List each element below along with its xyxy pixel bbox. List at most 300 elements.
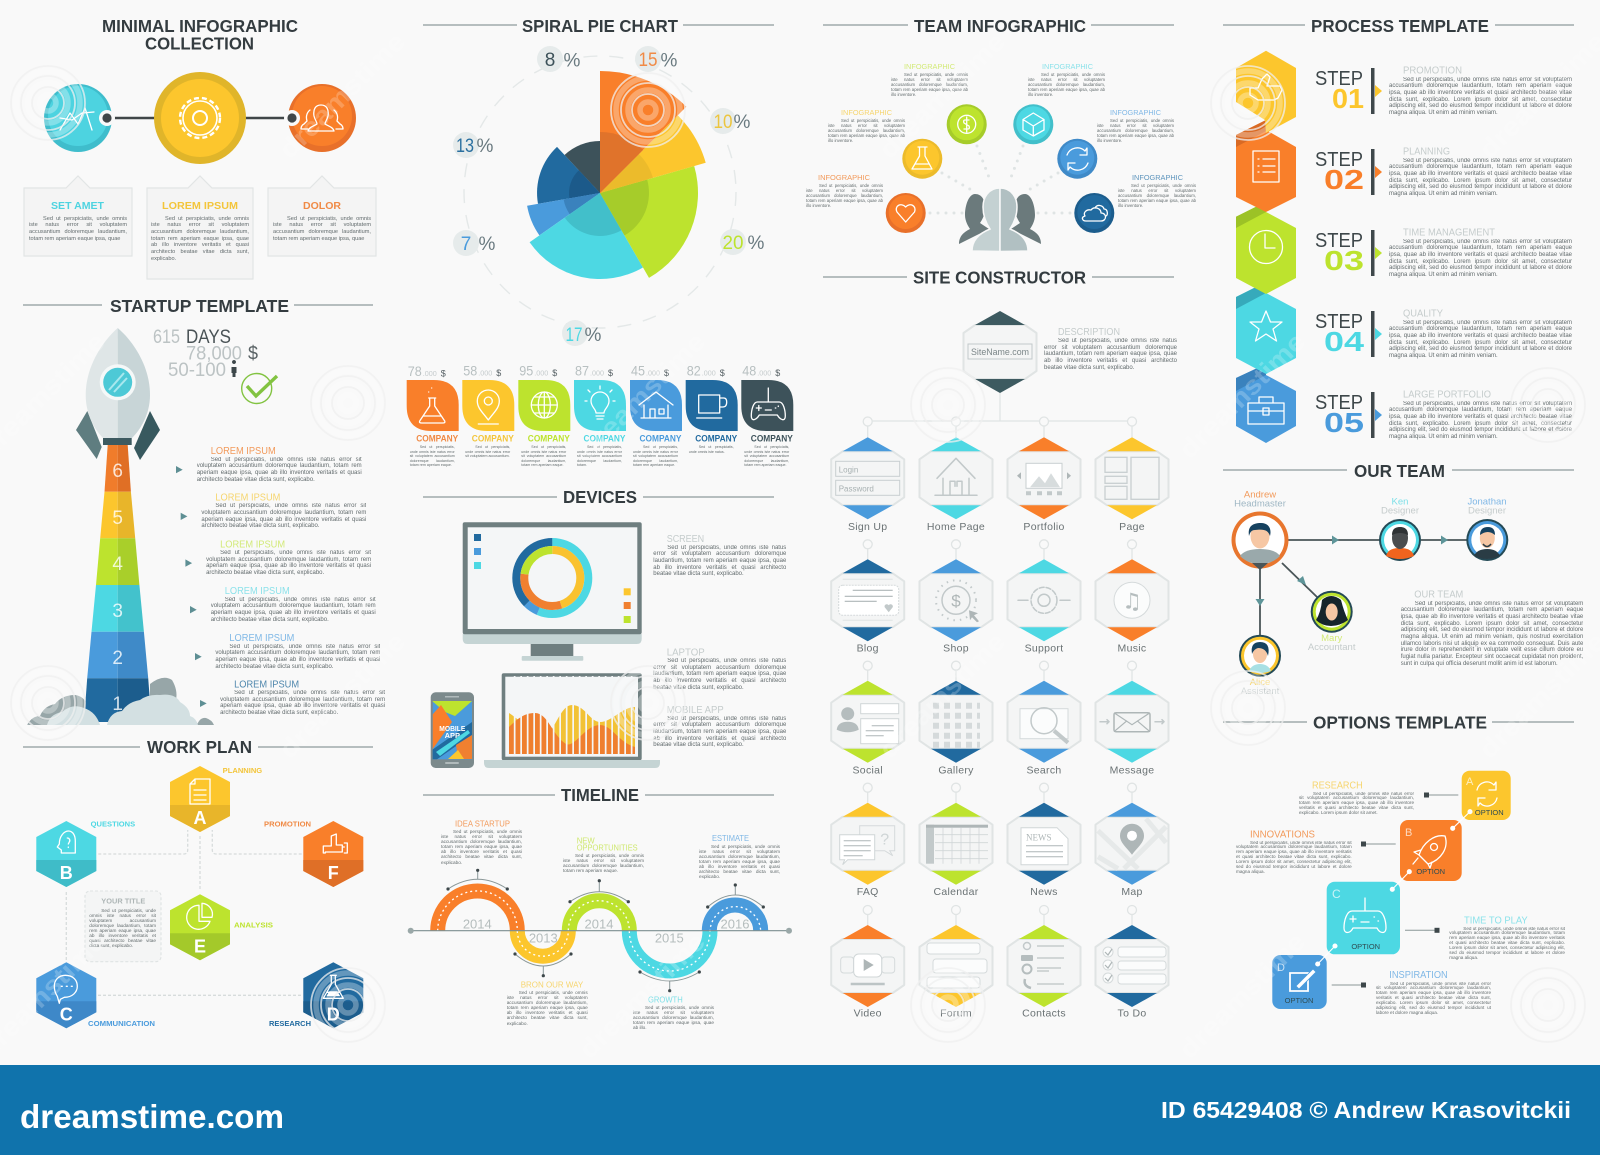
- panel: startup template: [23, 296, 385, 725]
- option D card: OPTION: [1285, 996, 1313, 1005]
- tile: news: News: [1030, 886, 1058, 898]
- callout: set amet: Sed ut perspiciatis, unde omnis iste natus error sit voluptatem accusantium doloremque laudantium, totam rem aperiam eaque ipsa, quae: [29, 216, 127, 242]
- footer credit: ID 65429408 © Andrew Krasovitckii: [1161, 1097, 1571, 1123]
- panel: our team: [1223, 461, 1583, 697]
- text box: your title: Sed ut perspiciatis, unde omnis iste natus error sit voluptatem accusantium doloremque laudantium, totam rem aperiam eaque ipsa, quae ab illo inventore veritatis et quasi architecto beatae vitae dicta sunt, explicabo.: [89, 908, 156, 948]
- hexagon labels: [88, 766, 311, 1028]
- step 6 text: LOREM IPSUM: [211, 446, 276, 457]
- node: heart: INFOGRAPHIC: [818, 173, 871, 182]
- icon: check mark: [242, 374, 277, 404]
- phone: APP: [445, 731, 460, 740]
- monitor with donut chart: [463, 522, 642, 661]
- milestone: idea startup: IDEA STARTUP: [455, 819, 510, 829]
- option C card: [1327, 882, 1400, 954]
- person: mary: [1308, 591, 1356, 653]
- hexagon labels: QUESTIONS: [91, 820, 135, 829]
- card: orange company flask: [407, 363, 459, 470]
- hexagon C communication: C: [60, 1004, 73, 1024]
- text: dreamstime: [273, 26, 411, 164]
- stats: days, money, people: [153, 327, 258, 381]
- card: dark company gamepad: 48: [742, 362, 756, 378]
- step 4 text: Sed ut perspiciatis, unde omnis iste natus error sit voluptatem accusantium doloremque laudantium, totam rem aperiam eaque ipsa, quae ab illo inventore veritatis et quasi architecto beatae vitae dicta sunt, explicabo.: [206, 550, 371, 576]
- person: mary: Accountant: [1308, 642, 1356, 653]
- milestone: new opportunities: NEW: [577, 835, 595, 845]
- text: dreamstime: [573, 326, 711, 464]
- hexagon D research: D: [327, 1004, 340, 1024]
- card: green company globe: $: [552, 368, 557, 378]
- wave chart: [408, 891, 792, 971]
- card: green company globe: [518, 362, 570, 470]
- stats: days, money, people: $: [248, 344, 258, 364]
- title: COLLECTION: [145, 34, 254, 54]
- percentage labels: %: [585, 325, 602, 346]
- step 2: STEP: [1315, 149, 1363, 171]
- person: jonathan: Jonathan: [1467, 496, 1507, 507]
- person: andrew: Andrew: [1244, 490, 1276, 501]
- option A card: [1462, 771, 1511, 820]
- tile: home page: Home Page: [927, 521, 985, 533]
- tile: calendar: [920, 783, 992, 898]
- connector tree: [863, 393, 1136, 426]
- tile: forum: [920, 906, 992, 1020]
- option text: inspiration: INSPIRATION: [1389, 970, 1448, 981]
- card: orange company flask: 78: [408, 363, 422, 379]
- step 3: STEP: [1315, 230, 1363, 252]
- connector dots: [99, 110, 300, 126]
- icon: orange people circle: [288, 84, 356, 152]
- icon: teal chart circle: [44, 84, 112, 152]
- option D card: [1272, 955, 1327, 1009]
- hexagon 3 clock: [1236, 202, 1296, 294]
- step 5: STEP: [1315, 392, 1363, 414]
- footer logo: dreamstime.com: [20, 1098, 284, 1135]
- tile: faq: FAQ: [857, 886, 879, 898]
- tile: to do: To Do: [1118, 1008, 1146, 1020]
- year labels: 2014: [463, 916, 492, 931]
- card: yellow company pin: Sed ut perspiciatis, unde omnis iste natus error sit voluptatem accusantium.: [465, 445, 510, 458]
- panel: work plan: [23, 737, 373, 1028]
- card: yellow company pin: .000: [478, 368, 492, 378]
- person: ken: Designer: [1381, 505, 1419, 516]
- hexagon labels: RESEARCH: [269, 1019, 311, 1028]
- text: screen: SCREEN: [667, 534, 704, 545]
- tile: social: [831, 661, 904, 776]
- tile: contacts: Contacts: [1022, 1008, 1066, 1020]
- card: cyan company bulb: [574, 362, 626, 470]
- phone: MOBILE: [439, 724, 465, 733]
- tile: sign up: [831, 426, 904, 533]
- icon: rocket: [76, 328, 160, 460]
- card: dark blue company cup: $: [720, 368, 725, 378]
- chart: rocket stripes: [84, 445, 152, 722]
- tile: music: Music: [1118, 643, 1146, 655]
- card: yellow company pin: [462, 362, 514, 461]
- dotted links: [930, 146, 1070, 213]
- percentage labels: [453, 46, 765, 346]
- step 2 text: [195, 633, 380, 672]
- hexagon B questions: [36, 821, 96, 887]
- tile: faq: [831, 783, 904, 898]
- option B card: [1400, 820, 1462, 881]
- card: cyan company bulb: .000: [590, 368, 604, 378]
- icon: back smoke clouds: [27, 678, 214, 725]
- description: Sed ut perspiciatis, unde omnis iste natus error sit voluptatem accusantium doloremque laudantium, totam rem aperiam eaque ipsa, quae ab illo inventore veritatis et quasi architecto beatae vitae dicta sunt, explicabo.: [1044, 338, 1177, 371]
- step 2: [1315, 146, 1572, 198]
- step 6 text: [176, 446, 362, 484]
- node: cloud: Sed ut perspiciatis, unde omnis iste natus error sit voluptatem accusantium doloremque laudantium, totam rem aperiam eaque ipsa, quae ab illo inventore.: [1118, 182, 1196, 208]
- card: dark blue company cup: 82: [687, 362, 701, 378]
- milestone: estimate: ESTIMATE: [712, 833, 749, 843]
- heading: SPIRAL PIE CHART: [522, 16, 678, 36]
- hexagon chain: [1236, 51, 1296, 443]
- card: blue company house: 45: [631, 362, 645, 378]
- pie chart: [527, 71, 706, 279]
- card: cyan company bulb: Sed ut perspiciatis, unde omnis iste natus error sit voluptatem accusantium doloremque laudantium, totam.: [577, 445, 622, 467]
- percentage labels: 8: [545, 50, 555, 71]
- option text: innovations: INNOVATIONS: [1250, 829, 1315, 840]
- card: orange company flask: .000: [423, 369, 437, 378]
- text: dreamstime: [273, 626, 411, 764]
- percentage labels: %: [661, 50, 678, 72]
- card: cyan company bulb: 87: [575, 362, 589, 378]
- description: DESCRIPTION: [1058, 327, 1120, 338]
- step 3: Sed ut perspiciatis, unde omnis iste natus error sit voluptatem accusantium doloremque laudantium, totam rem aperiam eaque ipsa, quae ab illo inventore veritatis et quasi architecto beatae vitae dicta sunt, explicabo. Lorem ipsum dolor sit amet, consectetur adipiscing elit, sed do eiusmod tempor incididunt ut labore et dolore magna aliqua. Ut enim ad minim veniam.: [1389, 238, 1572, 278]
- year labels: 2013: [529, 931, 558, 946]
- step 5 text: [181, 493, 366, 531]
- node: coin: [891, 62, 987, 144]
- person: andrew: [1232, 490, 1288, 570]
- chart: rocket stripes: 2: [112, 648, 123, 669]
- step 2 text: Sed ut perspiciatis, unde omnis iste natus error sit voluptatem accusantium doloremque laudantium, totam rem aperiam eaque ipsa, quae ab illo inventore veritatis et quasi architecto beatae vitae dicta sunt, explicabo.: [215, 644, 380, 670]
- org links: [1256, 536, 1467, 635]
- hexagon C communication: [36, 962, 96, 1028]
- node: heart: [806, 173, 926, 233]
- card: dark company gamepad: Sed ut perspiciatis, unde omnis iste natus error sit voluptatem accusantium doloremque laudantium, totam rem aperiam eaque.: [744, 445, 789, 467]
- hexagon F promotion: [303, 821, 363, 887]
- card: green company globe: Sed ut perspiciatis, unde omnis iste natus error sit voluptatem accusantium doloremque laudantium, totam rem aperiam eaque.: [521, 445, 566, 467]
- text: our team: Sed ut perspiciatis, unde omnis iste natus error sit voluptatem accusantium doloremque laudantium, totam rem aperiam eaque ipsa, quae ab illo inventore veritatis et quasi architecto beatae vitae dicta sunt, explicabo. Lorem ipsum dolor sit amet, consectetur adipiscing elit, sed do eiusmod tempor incididunt ut labore et dolore magna aliqua. Ut enim ad minim veniam, quis nostrud exercitation ullamco laboris nisi ut aliquip ex ea commodo consequat. Duis aute irure dolor in reprehenderit in voluptate velit esse cillum dolore eu fugiat nulla pariatur. Excepteur sint occaecat cupidatat non proident, sunt in culpa qui officia deserunt mollit anim id est laborum.: [1401, 600, 1583, 667]
- heading: OPTIONS TEMPLATE: [1313, 712, 1487, 732]
- card: blue company house: .000: [646, 368, 660, 378]
- person: alice: [1239, 635, 1281, 697]
- hexagon 2 list: [1236, 120, 1296, 212]
- tile: gallery: Gallery: [938, 764, 974, 776]
- node: flask: INFOGRAPHIC: [841, 108, 893, 117]
- tile: search: Search: [1026, 764, 1062, 776]
- card: blue company house: COMPANY: [640, 434, 682, 445]
- card: blue company house: [630, 362, 682, 470]
- hexagon labels: COMMUNICATION: [88, 1019, 155, 1028]
- tile: news: [1008, 783, 1080, 898]
- card: dark company gamepad: COMPANY: [751, 434, 793, 445]
- panel: spiral pie chart: [423, 16, 774, 346]
- heading: STARTUP TEMPLATE: [110, 296, 289, 316]
- tile: map: [1096, 783, 1168, 898]
- percentage labels: 15: [638, 50, 658, 71]
- node: flask: [828, 108, 942, 179]
- panel: minimal infographic collection: [24, 16, 376, 279]
- tile: faq: ?: [880, 832, 889, 849]
- laptop with area chart: [484, 673, 660, 768]
- year labels: 2016: [721, 916, 749, 931]
- tile: music: ♫: [1122, 589, 1142, 614]
- text box: your title: YOUR TITLE: [101, 896, 145, 905]
- step 5 text: LOREM IPSUM: [215, 493, 280, 504]
- card: dark blue company cup: [686, 362, 738, 457]
- card: dark company gamepad: $: [775, 368, 780, 378]
- tile: blog: Blog: [857, 643, 879, 655]
- option B card: OPTION: [1416, 867, 1445, 876]
- tile: social: Social: [852, 764, 883, 776]
- option text: inspiration: [1332, 970, 1491, 1018]
- tile: search: [1008, 661, 1080, 776]
- step 2: 02: [1324, 164, 1364, 195]
- step 1 text: [200, 680, 385, 718]
- card: orange company flask: Sed ut perspiciatis, unde omnis iste natus error sit voluptatem accusantium doloremque laudantium, totam rem aperiam eaque.: [410, 445, 455, 467]
- option text: research: RESEARCH: [1312, 780, 1363, 791]
- step 1: [1315, 66, 1572, 118]
- milestone: idea startup: Sed ut perspiciatis, unde omnis iste natus error sit voluptatem accusantium doloremque laudantium, totam rem aperiam eaque ipsa, quae ab illo inventore veritatis et quasi architecto beatae vitae dicta sunt, explicabo.: [441, 829, 522, 865]
- text: dreamstime: [873, 26, 1011, 164]
- step 1 text: LOREM IPSUM: [234, 680, 299, 690]
- hexagon A planning: [170, 766, 230, 832]
- tile: map: Map: [1121, 886, 1143, 898]
- node: cloud: [1074, 173, 1196, 233]
- hexagon labels: ANALYSIS: [234, 921, 273, 930]
- card: green company globe: 95: [519, 362, 533, 378]
- person: mary: Mary: [1321, 633, 1342, 644]
- step 1: 01: [1332, 83, 1364, 114]
- card: cyan company bulb: COMPANY: [584, 434, 626, 445]
- option text: innovations: [1236, 829, 1396, 876]
- heading: SITE CONSTRUCTOR: [913, 268, 1086, 288]
- logo hexagon: [964, 311, 1036, 393]
- dashed connectors: [66, 830, 302, 995]
- step 2: Sed ut perspiciatis, unde omnis iste natus error sit voluptatem accusantium doloremque laudantium, totam rem aperiam eaque ipsa, quae ab illo inventore veritatis et quasi architecto beatae vitae dicta sunt, explicabo. Lorem ipsum dolor sit amet, consectetur adipiscing elit, sed do eiusmod tempor incididunt ut labore et dolore magna aliqua. Ut enim ad minim veniam.: [1389, 158, 1572, 197]
- percentage labels: 10: [714, 112, 732, 133]
- tile: message: [1096, 661, 1168, 776]
- card: blue company house: Sed ut perspiciatis, unde omnis iste natus error sit voluptatem accusantium doloremque laudantium, totam rem aperiam eaque.: [633, 445, 678, 467]
- callout: lorem ipsum: LOREM IPSUM: [162, 200, 238, 212]
- step 5: LARGE PORTFOLIO: [1403, 390, 1491, 400]
- step 4: STEP: [1315, 311, 1363, 333]
- step 1: Sed ut perspiciatis, unde omnis iste natus error sit voluptatem accusantium doloremque laudantium, totam rem aperiam eaque ipsa, quae ab illo inventore veritatis et quasi architecto beatae vitae dicta sunt, explicabo. Lorem ipsum dolor sit amet, consectetur adipiscing elit, sed do eiusmod tempor incididunt ut labore et dolore magna aliqua. Ut enim ad minim veniam.: [1389, 76, 1572, 116]
- text: dreamstime: [1173, 926, 1311, 1064]
- hexagon A planning: A: [194, 808, 206, 828]
- card: yellow company pin: COMPANY: [472, 434, 514, 445]
- node: cube: [1013, 62, 1105, 144]
- step 3 text: LOREM IPSUM: [225, 586, 290, 597]
- callout: set amet: SET AMET: [51, 200, 105, 212]
- step 4: 04: [1324, 326, 1365, 357]
- text: mobile app: Sed ut perspiciatis, unde omnis iste natus error sit voluptatem accusantium doloremque laudantium, totam rem aperiam eaque ipsa, quae ab illo inventore veritatis et quasi architecto beatae vitae dicta sunt, explicabo.: [653, 716, 786, 748]
- hexagon 5 briefcase: [1236, 364, 1296, 443]
- milestone: new opportunities: Sed ut perspiciatis, unde omnis iste natus error sit voluptatem accusantium doloremque laudantium, totam rem aperiam eaque.: [563, 853, 644, 873]
- card: dark blue company cup: Sed ut perspiciatis, unde omnis iste natus.: [689, 445, 734, 454]
- text: laptop: LAPTOP: [667, 648, 705, 659]
- person: ken: [1379, 496, 1421, 561]
- hexagon B questions: B: [60, 863, 73, 883]
- card: dark company gamepad: [741, 362, 793, 470]
- option text: time to play: Sed ut perspiciatis, unde omnis iste natus error sit voluptatem accusantium doloremque laudantium, totam rem aperiam eaque ipsa, quae ab illo inventore veritatis et quasi architecto beatae vitae dicta sunt, explicabo. Lorem ipsum dolor sit amet, consectetur adipiscing elit, sed do eiusmod tempor incididunt ut labore et dolore magna aliqua.: [1449, 926, 1565, 960]
- person: ken: Ken: [1392, 496, 1408, 507]
- node: cloud: INFOGRAPHIC: [1132, 173, 1184, 182]
- text: our team: OUR TEAM: [1414, 589, 1463, 600]
- percentage labels: 17: [566, 325, 582, 346]
- step 6 text: Sed ut perspiciatis, unde omnis iste natus error sit voluptatem accusantium doloremque laudantium, totam rem aperiam eaque ipsa, quae ab illo inventore veritatis et quasi architecto beatae vitae dicta sunt, explicabo.: [197, 456, 362, 483]
- option text: time to play: [1405, 915, 1565, 962]
- hexagon 4 star: [1236, 282, 1296, 374]
- step 3 text: [190, 586, 376, 624]
- percentage labels: %: [477, 136, 494, 157]
- chart: rocket stripes: 3: [112, 601, 123, 622]
- tile: forum: Forum: [940, 1008, 972, 1020]
- step 4 text: LOREM IPSUM: [220, 539, 285, 550]
- hexagon labels: PROMOTION: [264, 820, 311, 829]
- node: cube: INFOGRAPHIC: [1042, 62, 1094, 71]
- card: dark blue company cup: .000: [702, 368, 716, 378]
- tile: support: [1008, 540, 1080, 655]
- hexagon D research: [303, 962, 363, 1028]
- heading: WORK PLAN: [147, 737, 252, 757]
- tile: calendar: Calendar: [933, 886, 979, 898]
- icon: yellow gear circle: [154, 72, 246, 164]
- percentage labels: %: [734, 112, 751, 133]
- milestone: growth: [633, 995, 714, 1032]
- icon: people group: [959, 188, 1041, 252]
- tile: support: Support: [1025, 643, 1063, 655]
- percentage labels: 7: [461, 234, 471, 255]
- step 2 text: LOREM IPSUM: [229, 633, 294, 644]
- stats: days, money, people: DAYS: [186, 327, 231, 348]
- heading: DEVICES: [563, 487, 637, 507]
- panel: options template: [1223, 712, 1574, 1018]
- callout: dolor: Sed ut perspiciatis, unde omnis iste natus error sit voluptatem accusantium doloremque laudantium, totam rem aperiam eaque ipsa, quae: [273, 216, 371, 242]
- chart: rocket stripes: 5: [112, 508, 123, 529]
- text: dreamstime: [873, 626, 1011, 764]
- chart: rocket stripes: 1: [112, 694, 123, 715]
- tile: news: NEWS: [1026, 833, 1052, 843]
- tile: shop: Shop: [943, 643, 969, 655]
- heading: TIMELINE: [561, 785, 639, 805]
- stats: days, money, people: 78,000: [186, 344, 242, 364]
- text: dreamstime: [573, 926, 711, 1064]
- panel: team infographic: [806, 16, 1196, 252]
- milestone: bron our way: Sed ut perspiciatis, unde omnis iste natus error sit voluptatem accusantium doloremque laudantium, totam rem aperiam eaque ipsa, quae ab illo inventore veritatis et quasi architecto beatae vitae dicta sunt, explicabo.: [507, 990, 588, 1026]
- percentage labels: %: [564, 50, 581, 72]
- card: yellow company pin: 58: [463, 362, 477, 378]
- person: jonathan: [1466, 496, 1508, 561]
- person: alice: Alice: [1250, 677, 1270, 688]
- milestone: new opportunities: [563, 835, 644, 875]
- chart: rocket stripes: 6: [112, 461, 123, 482]
- tile: portfolio: Portfolio: [1023, 521, 1065, 533]
- milestone: growth: GROWTH: [648, 995, 683, 1005]
- step 5: 05: [1324, 407, 1364, 438]
- card: orange company flask: $: [441, 368, 446, 378]
- card: green company globe: .000: [534, 368, 548, 378]
- tile: blog: [831, 540, 904, 655]
- card: yellow company pin: $: [496, 368, 501, 378]
- step 3: TIME MANAGEMENT: [1403, 228, 1495, 238]
- panel: company row: [407, 362, 793, 470]
- tile: page: [1096, 426, 1168, 533]
- node: refresh: INFOGRAPHIC: [1110, 108, 1162, 117]
- percentage labels: %: [748, 233, 765, 254]
- node: coin: INFOGRAPHIC: [904, 62, 956, 71]
- step 4: QUALITY: [1403, 308, 1443, 320]
- callout: lorem ipsum: [147, 176, 253, 279]
- panel: devices: [423, 487, 786, 768]
- hexagon 1 thumbs up: [1236, 51, 1296, 133]
- text: dreamstime: [1473, 26, 1600, 164]
- phone: [431, 692, 474, 768]
- stats: days, money, people: 615: [153, 327, 180, 348]
- milestone: new opportunities: OPPORTUNITIES: [577, 843, 638, 853]
- card: dark company gamepad: .000: [757, 368, 771, 378]
- tile: music: [1096, 540, 1168, 655]
- callout: lorem ipsum: Sed ut perspiciatis, unde omnis iste natus error sit voluptatem accusantium doloremque laudantium, totam rem aperiam eaque ipsa, quae ab illo inventore veritatis et quasi architecto beatae vitae dicta sunt, explicabo.: [151, 216, 249, 262]
- step 5 text: Sed ut perspiciatis, unde omnis iste natus error sit voluptatem accusantium doloremque laudantium, totam rem aperiam eaque ipsa, quae ab illo inventore veritatis et quasi architecto beatae vitae dicta sunt, explicabo.: [201, 503, 366, 529]
- text: mobile app: MOBILE APP: [667, 705, 724, 716]
- option text: time to play: TIME TO PLAY: [1464, 915, 1528, 926]
- option C card: OPTION: [1351, 942, 1380, 951]
- hexagon E analysis: E: [194, 936, 206, 956]
- hexagon F promotion: F: [328, 863, 339, 883]
- percentage labels: %: [479, 234, 496, 255]
- option D card: D: [1277, 962, 1285, 974]
- option text: innovations: Sed ut perspiciatis, unde omnis iste natus error sit voluptatem accusantium doloremque laudantium, totam rem aperiam eaque ipsa, quae ab illo inventore veritatis et quasi architecto beatae vitae dicta sunt, explicabo. Lorem ipsum dolor sit amet, consectetur adipiscing elit, sed do eiusmod tempor incididunt ut labore et dolore magna aliqua.: [1236, 840, 1352, 874]
- step 4: [1315, 308, 1572, 360]
- heading: PROCESS TEMPLATE: [1311, 16, 1489, 36]
- title: MINIMAL INFOGRAPHIC: [102, 16, 298, 36]
- text: laptop: Sed ut perspiciatis, unde omnis iste natus error sit voluptatem accusantium doloremque laudantium, totam rem aperiam eaque ipsa, quae ab illo inventore veritatis et quasi architecto beatae vitae dicta sunt, explicabo.: [653, 658, 786, 691]
- hexagon labels: PLANNING: [223, 766, 262, 775]
- milestone: bron our way: BRON OUR WAY: [521, 979, 584, 989]
- milestone: estimate: Sed ut perspiciatis, unde omnis iste natus error sit voluptatem accusantium doloremque laudantium, totam rem aperiam eaque ipsa, quae ab illo inventore veritatis et quasi architecto beatae vitae dicta sunt, explicabo.: [699, 844, 780, 879]
- card: green company globe: COMPANY: [528, 434, 570, 445]
- percentage labels: 20: [722, 233, 744, 254]
- list: six steps: [176, 446, 385, 718]
- panel: process template: [1223, 16, 1574, 443]
- step 4: Sed ut perspiciatis, unde omnis iste natus error sit voluptatem accusantium doloremque laudantium, totam rem aperiam eaque ipsa, quae ab illo inventore veritatis et quasi architecto beatae vitae dicta sunt, explicabo. Lorem ipsum dolor sit amet, consectetur adipiscing elit, sed do eiusmod tempor incididunt ut labore et dolore magna aliqua. Ut enim ad minim veniam.: [1389, 320, 1572, 359]
- title: [102, 16, 298, 54]
- step 1: STEP: [1315, 68, 1363, 90]
- person: andrew: Headmaster: [1234, 499, 1286, 510]
- option text: inspiration: Sed ut perspiciatis, unde omnis iste natus error sit voluptatem accusantium doloremque laudantium, totam rem aperiam eaque ipsa, quae ab illo inventore veritatis et quasi architecto beatae vitae dicta sunt, explicabo. Lorem ipsum dolor sit amet, consectetur adipiscing elit, sed do eiusmod tempor incididunt ut labore et dolore magna aliqua.: [1376, 982, 1491, 1015]
- card: cyan company bulb: $: [608, 368, 613, 378]
- percentage labels: 13: [456, 136, 474, 157]
- tile: shop: [920, 540, 992, 655]
- heading: TEAM INFOGRAPHIC: [914, 16, 1086, 36]
- year labels: 2014: [585, 916, 613, 931]
- panel: timeline: [408, 785, 792, 1032]
- text: screen: Sed ut perspiciatis, unde omnis iste natus error sit voluptatem accusantium doloremque laudantium, totam rem aperiam eaque ipsa, quae ab illo inventore veritatis et quasi architecto beatae vitae dicta sunt, explicabo.: [653, 544, 786, 577]
- dashed ring: [464, 56, 736, 328]
- callout: set amet: [24, 176, 132, 256]
- tile: video: Video: [854, 1008, 882, 1020]
- person: alice: Assistant: [1241, 686, 1280, 697]
- step 3: [1315, 228, 1572, 280]
- node: refresh: Sed ut perspiciatis, unde omnis iste natus error sit voluptatem accusantium doloremque laudantium, totam rem aperiam eaque ipsa, quae ab illo inventore.: [1097, 118, 1174, 142]
- white link dots: [1316, 810, 1472, 966]
- tile: to do: [1096, 906, 1168, 1020]
- tile: portfolio: [1008, 426, 1080, 533]
- step 2: PLANNING: [1403, 146, 1450, 158]
- callout: dolor: DOLOR: [303, 200, 341, 212]
- callout: dolor: [268, 176, 376, 256]
- option A card: OPTION: [1475, 808, 1504, 817]
